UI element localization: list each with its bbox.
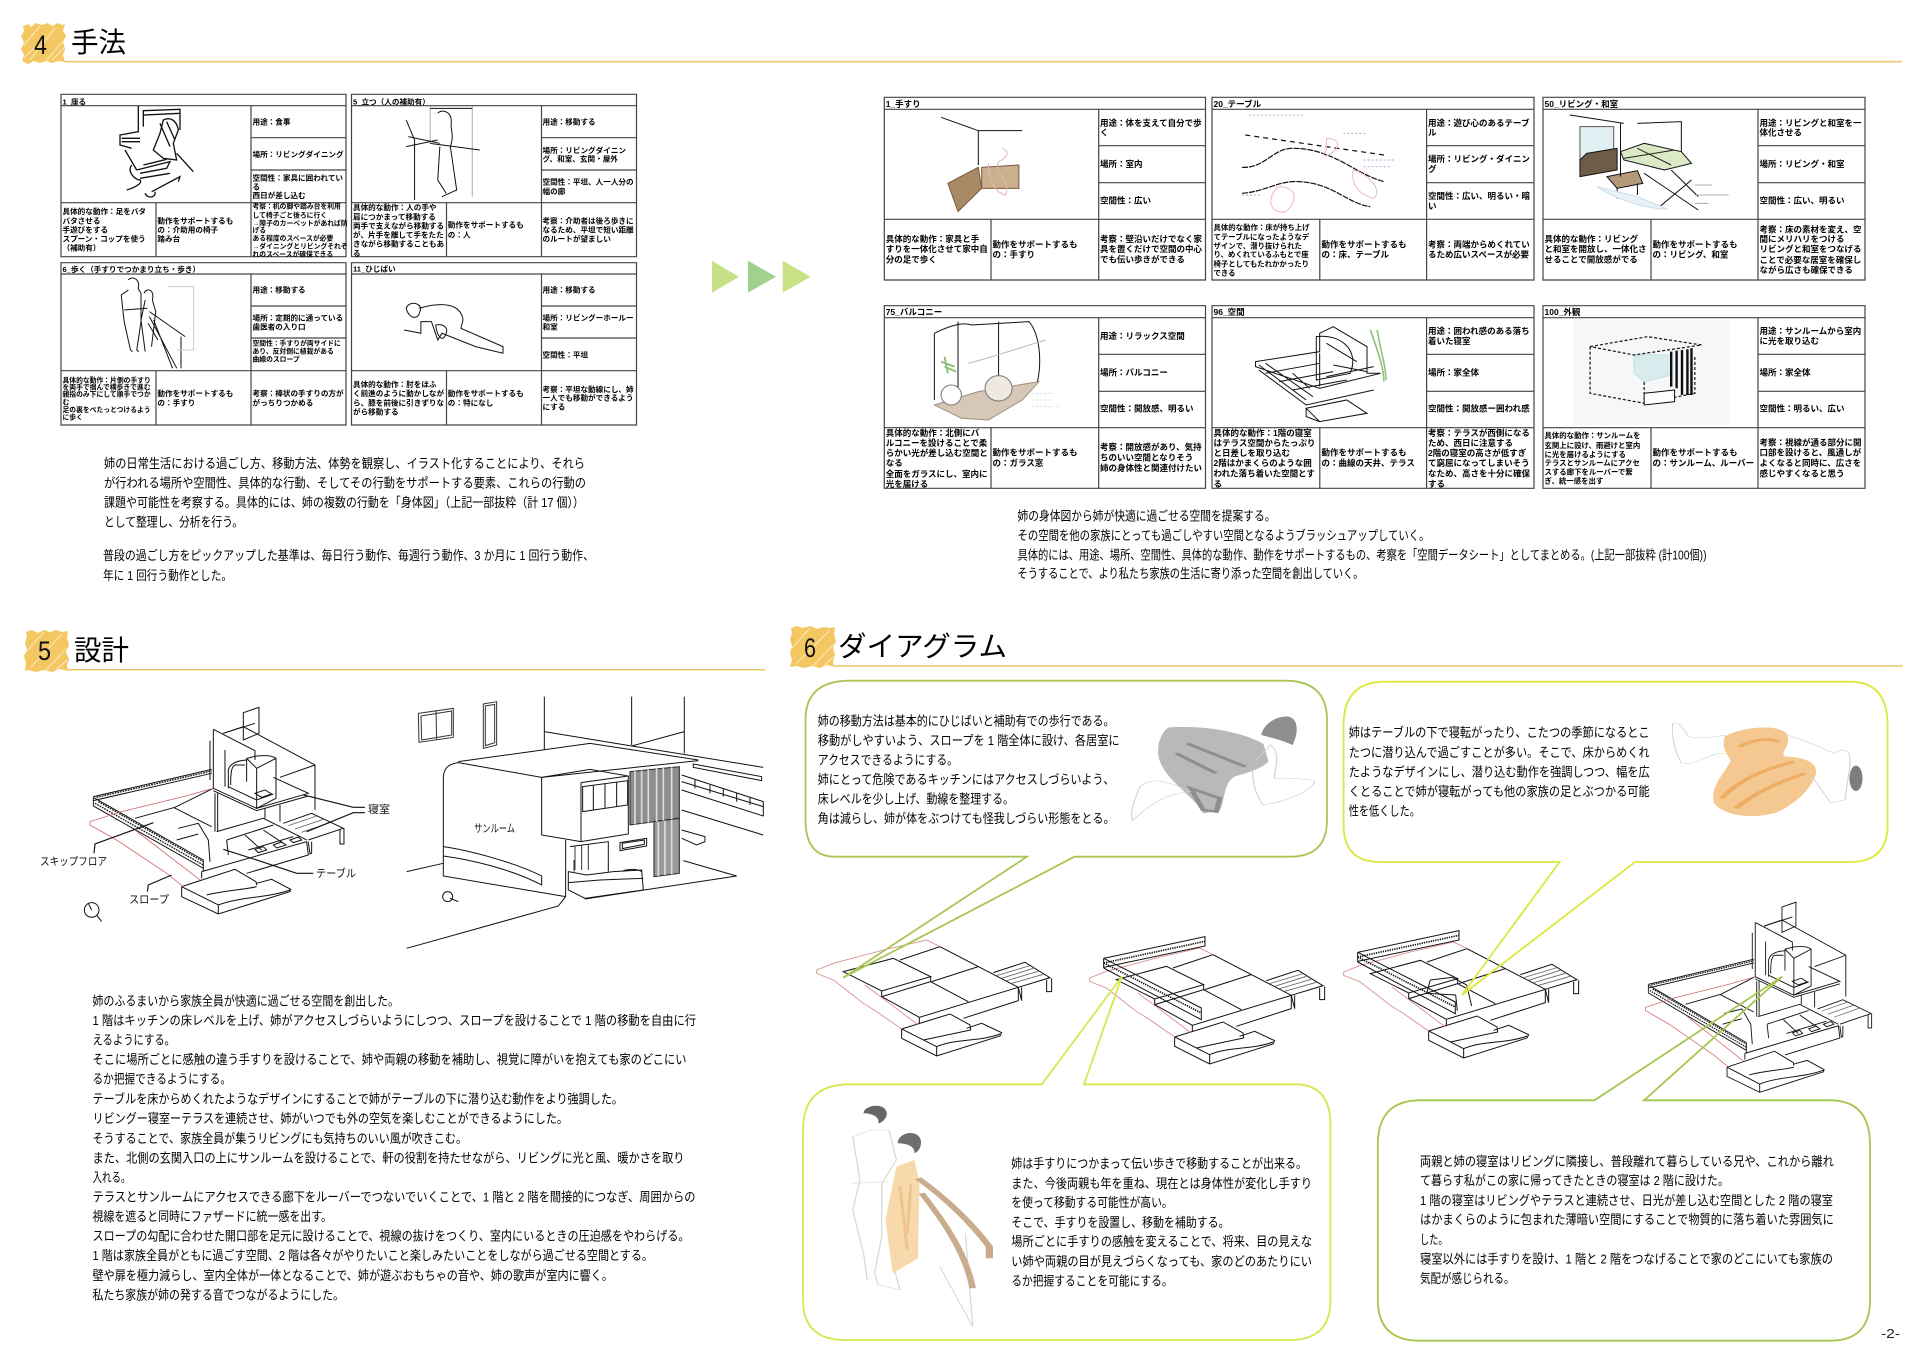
body text: design: そこに場所ごとに感触の違う手すりを設けることで、姉や両親の移動を補助し、視覚に障がいを抱えても家のどこにい <box>92 1052 686 1067</box>
figure: lying in orange <box>1672 723 1863 816</box>
sheet: 6 歩く: がっちりつかめる <box>252 397 313 407</box>
sheet: 5 立つ <box>352 94 636 258</box>
callout 3 text: 場所ごとに手すりの感触を変えることで、将来、目の見えな <box>1011 1234 1312 1249</box>
sketch: exterior <box>1573 320 1729 425</box>
number badge 5: 5 <box>38 636 51 666</box>
sheet: 1 座る: 空間性：家具に囲われてい <box>252 172 343 182</box>
sheet: 5 立つ: る <box>353 249 361 258</box>
callout 2 text: 性を低くした。 <box>1349 804 1420 818</box>
space sheet: 20 テーブル: 場所：リビング・ダイニン <box>1428 154 1530 164</box>
space sheet: 100 外観: の：サンルーム、ルーバー <box>1652 458 1754 468</box>
sheet: 1 座る: スプーン・コップを使う <box>62 233 146 243</box>
number badge 6 <box>790 626 836 668</box>
space sheet: 75 バルコニー: ちのいい空間となりそう <box>1100 452 1193 462</box>
space sheet: 20 テーブル: 考察：両端からめくれてい <box>1428 240 1530 250</box>
sheet: 1 座る: の：介助用の椅子 <box>157 224 219 234</box>
body text: design: 壁や扉を極力減らし、室内全体が一体となることで、姉が遊ぶおもちゃの音や、姉の歌声が室内に響く。 <box>92 1268 613 1283</box>
body text: design: 私たち家族が姉の発する音でつながるようにした。 <box>92 1288 344 1302</box>
sketch: handrail <box>941 117 1022 212</box>
sheet: 1 座る: る <box>252 182 260 191</box>
space sheet: 96 空間: 空間性：開放感ー囲われ感 <box>1428 404 1530 414</box>
sheet: 1 座る: 場所：リビングダイニング <box>252 149 344 159</box>
sheet: 1 座る: 具体的な動作：足をバタ <box>62 206 146 216</box>
callout 4 text <box>1420 1154 1834 1286</box>
sheet: 11 ひじばい: 11_ひじばい <box>353 263 396 273</box>
space sheet: 50 リビング・和室: ながら広さも確保できる <box>1760 265 1853 275</box>
sheet: 5 立つ: のルートが望ましい <box>542 233 611 243</box>
sheet: 1 座る: れのスペースが確保できる <box>252 250 333 259</box>
body text: section 4 right: 具体的には、用途、場所、空間性、具体的な動作、動作をサポートするもの、考察を「空間データシート」としてまとめる。(上記一部抜粋 (計100個)) <box>1018 548 1706 563</box>
sheet: 11 ひじばい <box>352 263 636 425</box>
sheet: 11 ひじばい: にする <box>542 402 565 411</box>
callout 4 text: 気配が感じられる。 <box>1420 1271 1514 1286</box>
figure: crawling in grey <box>1132 716 1314 821</box>
sheet: 11 ひじばい: 具体的な動作：肘をほふ <box>353 379 437 389</box>
space sheet: 50 リビング・和室: 具体的な動作：リビング <box>1544 234 1639 244</box>
heading: 設計: 設計 <box>74 635 129 666</box>
callout 2 text: たつに潜り込んで過ごすことが多い。そこで、床からめくれ <box>1349 745 1650 760</box>
section 6 header <box>790 626 1903 668</box>
sheet: 6 歩く: む <box>62 399 70 407</box>
space sheet: 96 空間: の：曲線の天井、テラス <box>1322 458 1415 468</box>
section 4 header <box>21 23 1902 64</box>
label: テーブル: テーブル <box>316 866 356 880</box>
diagram 3: floor with table <box>1344 931 1579 1058</box>
space sheet: 1 手すり: く <box>1100 128 1109 138</box>
space sheet: 75 バルコニー: らかい光が差し込む空間と <box>886 448 988 458</box>
body text: section 4 left: として整理し、分析を行う。 <box>104 515 243 530</box>
callout 2 text <box>1349 725 1650 818</box>
space sheet: 1 手すり: すりを一体化させて家中自 <box>886 244 988 254</box>
space sheet: 50 リビング・和室: の：リビング、和室 <box>1652 250 1729 260</box>
body text: design: 入れる。 <box>92 1170 130 1185</box>
sheet: 1 座る: して椅子ごと後ろに行く <box>252 210 327 219</box>
sketch: table <box>1242 115 1394 212</box>
callout 3: handrail <box>803 977 1330 1340</box>
space sheet: 1 手すり: 場所：室内 <box>1100 159 1143 169</box>
body text: section 4 right: 姉の身体図から姉が快適に過ごせる空間を提案する。 <box>1018 508 1276 524</box>
body text: section 4 left <box>103 456 594 583</box>
callout 3 text <box>1011 1156 1312 1288</box>
space sheet: 20 テーブル: できる <box>1214 268 1236 278</box>
callout 2: table <box>1344 682 1888 995</box>
body text: design: テラスとサンルームにアクセスできる廊下をルーバーでつないでいくことで、1 階と 2 階を間接的につなぎ、周囲からの <box>92 1190 696 1204</box>
space sheet: 96 空間: なため、高さを十分に確保 <box>1428 468 1531 478</box>
callout 1: movement <box>806 681 1327 978</box>
space sheet: 75 バルコニー: 動作をサポートするも <box>992 448 1078 458</box>
space sheet: 20 テーブル: 20_テーブル <box>1214 99 1262 109</box>
space sheet: 100 外観: スする廊下をルーバーで繋 <box>1544 468 1633 476</box>
space sheet: 50 リビング・和室 <box>1543 97 1865 280</box>
space sheet: 20 テーブル: グ <box>1428 164 1437 174</box>
page number: -2- <box>1881 1326 1900 1341</box>
sheet: 5 立つ: 肩につかまって移動する <box>353 211 436 221</box>
callout 4 text: て暮らす私がこの家に帰ってきたときの寝室は 2 階に設けた。 <box>1420 1173 1729 1188</box>
space sheet: 20 テーブル: るため広いスペースが必要 <box>1428 250 1529 260</box>
space sheet: 20 テーブル: の：床、テーブル <box>1322 250 1389 260</box>
space sheet: 50 リビング・和室: 場所：リビング・和室 <box>1760 159 1845 169</box>
space sheet: 75 バルコニー: 光を届ける <box>886 479 928 489</box>
space sheet: 1 手すり: の：手すり <box>992 250 1035 260</box>
sheet: 5 立つ: 動作をサポートするも <box>448 219 524 229</box>
space sheet: 1 手すり: 動作をサポートするも <box>992 240 1078 250</box>
space sheet: 50 リビング・和室: ことで必要な居室を確保し <box>1760 255 1861 265</box>
sheet: 5 立つ: 具体的な動作：人の手や <box>353 202 437 212</box>
space sheet: 100 外観: 場所：家全体 <box>1760 368 1811 378</box>
body text: design: 1 階は家族全員がともに過ごす空間、2 階は各々がやりたいこと楽しみたいことをしながら過ごせる空間とする。 <box>92 1248 653 1263</box>
sheet: 5 立つ: 5_立つ（人の補助有） <box>353 96 430 106</box>
sketch: balcony <box>934 322 1059 420</box>
space sheet: 96 空間: 考察：テラスが西側になる <box>1428 428 1530 438</box>
callout 3 text: 姉は手すりにつかまって伝い歩きで移動することが出来る。 <box>1011 1156 1307 1171</box>
sheet: 11 ひじばい: 空間性：平坦 <box>542 350 588 360</box>
sketch: walking with handrail <box>121 278 194 368</box>
body text: design <box>92 994 696 1302</box>
callout 1 text: 移動がしやすいよう、スロープを 1 階全体に設け、各居室に <box>818 733 1120 748</box>
space sheet: 1 手すり: 用途：体を支えて自分で歩 <box>1100 118 1202 128</box>
body text: design: リビングー寝室ーテラスを連続させ、姉がいつでも外の空気を楽しむことができるようにした。 <box>92 1111 568 1126</box>
sheet: 1 座る: ある程度のスペースが必要 <box>252 234 333 243</box>
sheet: 6 歩く: 場所：定期的に通っている <box>252 313 343 323</box>
space sheet: 50 リビング・和室: 考察：床の素材を変え、空 <box>1760 224 1862 234</box>
space sheet: 75 バルコニー <box>884 306 1206 489</box>
space sheet: 100 外観 <box>1543 306 1865 488</box>
sheet: 1 座る: 動作をサポートするも <box>157 215 233 225</box>
sheet: 5 立つ: きながら移動することもあ <box>353 239 445 249</box>
space sheet: 20 テーブル: り、めくれているふもとで座 <box>1214 250 1309 259</box>
body text: section 4 left: 年に 1 回行う動作とした。 <box>103 568 232 583</box>
building exterior drawing <box>407 697 763 948</box>
body text: section 4 left: が行われる場所や空間性、具体的な行動、そしてその行動をサポートする要素、これらの行動の <box>104 475 586 490</box>
callout 2 text: 姉はテーブルの下で寝転がったり、こたつの季節になるとこ <box>1349 725 1650 740</box>
body text: section 4 right: その空間を他の家族にとっても過ごしやすい空間となるようブラッシュアップしていく。 <box>1018 528 1430 543</box>
body text: section 4 left: 課題や可能性を考察する。具体的には、姉の複数の行動を「身体図」（上記一部抜粋（計 17 個）） <box>104 495 584 510</box>
sheet: 11 ひじばい: 動作をサポートするも <box>448 388 524 398</box>
space sheet: 20 テーブル: 空間性：広い、明るい・暗 <box>1428 191 1531 201</box>
space sheet: 96 空間: はテラス空間からたっぷり <box>1214 438 1315 448</box>
sheet: 1 座る <box>61 94 348 259</box>
space sheet: 100 外観: に光を届けるようにする <box>1544 450 1626 459</box>
space sheet: 96 空間: 場所：家全体 <box>1428 368 1480 378</box>
space sheet: 75 バルコニー: 用途：リラックス空間 <box>1100 331 1185 341</box>
space sheet: 1 手すり: 分の足で歩く <box>886 254 937 264</box>
space sheet: 100 外観: よくなると同時に、広さを <box>1760 458 1861 468</box>
callout 4 text: 寝室以外には手すりを設け、1 階と 2 階をつなげることで家のどこにいても家族の <box>1420 1252 1833 1266</box>
space sheet: 96 空間: 着いた寝室 <box>1428 336 1471 346</box>
space sheet: 1 手すり: 考察：壁沿いだけでなく家 <box>1100 234 1203 244</box>
body text: design: えるようにする。 <box>92 1032 175 1048</box>
callout 1 text: 角は減らし、姉が体をぶつけても怪我しづらい形態をとる。 <box>818 811 1114 826</box>
diagram 2: floor with handrail band <box>1090 937 1325 1064</box>
callout 4: bedrooms <box>1378 977 1870 1341</box>
space sheet: 96 空間: 96_空間 <box>1214 307 1245 317</box>
sheet: 1 座る: バタさせる <box>62 215 100 225</box>
callout 1 text: アクセスできるようにする。 <box>818 752 958 768</box>
sheet: 5 立つ: 考察：介助者は後ろ歩きに <box>542 216 634 226</box>
label: スロープ: スロープ <box>129 893 169 906</box>
callout 2 text: くとることで姉が寝転がっても他の家族の足とぶつかる可能 <box>1349 784 1650 799</box>
label: サンルーム: サンルーム <box>474 822 515 835</box>
space sheet: 96 空間: 動作をサポートするも <box>1322 448 1407 458</box>
sheet: 6 歩く: 足の裏をぺたっとつけるよう <box>62 405 151 414</box>
section 5 header <box>24 630 765 672</box>
sheet: 6 歩く: 6_歩く（手すりでつかまり立ち・歩き） <box>62 264 200 274</box>
sheet: 6 歩く: 親指のみ下にして順手でつか <box>62 390 151 399</box>
space sheet: 1 手すり: 具を置くだけで空間の中心 <box>1100 244 1203 254</box>
space sheet: 50 リビング・和室: リビングと和室をつなげる <box>1760 244 1862 254</box>
space sheet: 50 リビング・和室: 50_リビング・和室 <box>1544 99 1619 109</box>
space sheet: 1 手すり: 1_手すり <box>886 99 921 109</box>
body text: design: 視線を遮ると同時にファザードに統一感を出す。 <box>92 1209 332 1224</box>
space sheet: 100 外観: 空間性：明るい、広い <box>1760 404 1845 414</box>
space sheet: 50 リビング・和室: 間にメリハリをつける <box>1760 234 1845 244</box>
space sheet: 100 外観: 玄関上に設け、雨避けと室内 <box>1544 441 1640 450</box>
space sheet: 100 外観: 具体的な動作：サンルームを <box>1544 431 1640 440</box>
sheet: 1 座る: 手遊びをする <box>62 224 108 234</box>
sheet: 6 歩く: 動作をサポートするも <box>157 388 233 398</box>
sheet: 5 立つ: グ、和室、玄関・屋外 <box>542 154 618 164</box>
space sheet: 50 リビング・和室: 体化させる <box>1760 128 1802 138</box>
space sheet: 100 外観: 考察：視線が通る部分に開 <box>1760 438 1862 448</box>
space sheet: 1 手すり: 具体的な動作：家具と手 <box>886 234 980 244</box>
space sheet: 100 外観: に光を取り込む <box>1760 336 1820 346</box>
sheet: 11 ひじばい: の：特になし <box>448 397 493 407</box>
sheet: 6 歩く: 曲線のスロープ <box>252 354 300 363</box>
space sheet: 50 リビング・和室: と和室を開放し、一体化さ <box>1544 244 1647 254</box>
space sheet: 75 バルコニー: 75_バルコニー <box>886 307 942 317</box>
sheet: 11 ひじばい: 用途：移動する <box>542 285 596 295</box>
sheet: 5 立つ: 空間性：平坦、人一人分の <box>542 176 634 186</box>
sheet: 1 座る: （補助有） <box>62 243 100 253</box>
sheet: 5 立つ: が、片手を離して手をたた <box>353 229 444 239</box>
sheet: 5 立つ: 両手で支えながら移動する <box>353 221 444 231</box>
space sheet: 75 バルコニー: 空間性：開放感、明るい <box>1100 404 1194 414</box>
sheet: 11 ひじばい: 場所：リビングーホールー <box>542 313 634 323</box>
sheet: 6 歩く: の：手すり <box>157 397 195 407</box>
callout 4 text: した。 <box>1420 1232 1448 1247</box>
sheet: 1 座る: 踏み台 <box>157 233 181 243</box>
callout 2 text: たようなデザインにし、潜り込む動作を強調しつつ、幅を広 <box>1349 764 1650 780</box>
number badge 4: 4 <box>34 30 47 60</box>
space sheet: 100 外観: 用途：サンルームから室内 <box>1760 326 1861 336</box>
sheet: 11 ひじばい: がら移動する <box>353 407 399 417</box>
space sheet: 20 テーブル: ル <box>1428 128 1437 138</box>
callout 1 text: 床レベルを少し上げ、動線を整理する。 <box>818 792 1014 806</box>
sheet: 11 ひじばい: く前進のように動かしなが <box>353 388 445 398</box>
sheet: 1 座る: げる <box>252 226 266 235</box>
sheet: 1 座る: 西日が差し込む <box>252 190 306 200</box>
sheet: 6 歩く <box>61 263 346 425</box>
number badge 5 <box>24 630 69 672</box>
sheet: 1 座る: →障子のカーペットがあれば防 <box>252 218 348 227</box>
figure: walking with handrail <box>853 1106 989 1327</box>
isometric design drawing <box>40 707 390 922</box>
callout 4 text: 1 階の寝室はリビングやテラスと連続させ、日光が差し込む空間とした 2 階の寝室 <box>1420 1193 1833 1208</box>
sheet: 6 歩く: 歯医者の入り口 <box>252 322 306 332</box>
body text: design: 姉のふるまいから家族全員が快適に過ごせる空間を創出した。 <box>92 994 399 1008</box>
sketch: standing figure <box>406 107 480 200</box>
space sheet: 100 外観: 感じやすくなると思う <box>1760 468 1845 478</box>
heading: 手法: 手法 <box>71 27 126 58</box>
sketch: space isometric <box>1255 327 1386 422</box>
body text: design: 1 階はキッチンの床レベルを上げ、姉がアクセスしづらいようにしつつ、スロープを設けることで 1 階の移動を自由に行 <box>92 1013 696 1028</box>
space sheet: 50 リビング・和室: 動作をサポートするも <box>1652 240 1738 250</box>
space sheet: 1 手すり <box>884 97 1206 280</box>
space sheet: 75 バルコニー: 姉の身体性と関連付けたい <box>1100 463 1202 473</box>
body text: design: テーブルを床からめくれたようなデザインにすることで姉がテーブルの下に潜り込む動作をより強調した。 <box>92 1092 623 1106</box>
callout 3 text: を使って移動する可能性が高い。 <box>1011 1195 1173 1210</box>
body text: design: スロープの勾配に合わせた開口部を足元に設けることで、視線の抜けをつくり、室内にいるときの圧迫感をやわらげる。 <box>92 1228 690 1244</box>
sheet: 5 立つ: 場所：リビングダイニン <box>542 145 626 155</box>
arrows between sheets <box>712 261 811 293</box>
sheet: 11 ひじばい: ら、膝を前後に引きずりな <box>353 397 445 407</box>
space sheet: 20 テーブル <box>1212 97 1534 280</box>
sketch: crawling figure <box>404 303 503 353</box>
callout 4 text: はかまくらのように包まれた薄暗い空間にすることで物質的に落ち着いた雰囲気に <box>1420 1212 1834 1227</box>
space sheet: 75 バルコニー: 具体的な動作：北側にバ <box>886 428 980 438</box>
space sheet: 96 空間 <box>1212 306 1534 489</box>
callout 3 text: るか把握することを可能にする。 <box>1011 1274 1173 1288</box>
space sheet: 1 手すり: 空間性：広い <box>1100 196 1151 206</box>
sheet: 6 歩く: あり、反対側に植栽がある <box>252 347 334 356</box>
space sheet: 75 バルコニー: ルコニーを設けることで柔 <box>886 438 988 448</box>
space sheet: 75 バルコニー: の：ガラス窓 <box>992 458 1044 468</box>
space sheet: 20 テーブル: ザインで、潜り抜けられた <box>1214 242 1302 250</box>
sheet: 6 歩く: 具体的な動作：片側の手すり <box>62 375 151 384</box>
space sheet: 96 空間: する <box>1428 479 1445 489</box>
sheet: 5 立つ: の：人 <box>448 230 471 239</box>
space sheet: 20 テーブル: 椅子としてもたれかかったり <box>1214 260 1309 268</box>
callout 3 text: また、今後両親も年を重ね、現在とは身体性が変化し手すり <box>1011 1176 1312 1191</box>
sheet: 1 座る: 1_座る <box>62 96 86 106</box>
sketch: living and tatami <box>1570 115 1729 210</box>
space sheet: 96 空間: て窮屈になってしまいそう <box>1428 458 1530 468</box>
body text: design: また、北側の玄関入口の上にサンルームを設けることで、軒の役割を持たせながら、リビングに光と風、暖かさを取り <box>92 1150 684 1166</box>
sheet: 1 座る: 用途：食事 <box>252 116 291 126</box>
space sheet: 20 テーブル: てテーブルになったようなデ <box>1214 232 1310 242</box>
space sheet: 1 手すり: でも伝い歩きができる <box>1100 254 1185 264</box>
number badge 4 <box>21 23 66 64</box>
sketch: seated figure <box>120 106 193 197</box>
body text: design: そうすることで、家族全員が集うリビングにも気持ちのいい風が吹きこむ。 <box>92 1131 467 1146</box>
sheet: 5 立つ: 幅の廊 <box>542 186 566 196</box>
space sheet: 20 テーブル: 具体的な動作：床が持ち上げ <box>1214 223 1310 232</box>
callout 3 text: そこで、手すりを設置し、移動を補助する。 <box>1011 1215 1230 1230</box>
sheet: 5 立つ: なるため、平坦で短い距離 <box>542 225 634 235</box>
space sheet: 75 バルコニー: 全面をガラスにし、室内に <box>886 469 988 479</box>
label: 寝室: 寝室 <box>368 803 390 816</box>
sheet: 11 ひじばい: 一人でも移動ができるよう <box>542 393 633 403</box>
space sheet: 100 外観: テラスとサンルームにアクセ <box>1544 458 1640 468</box>
space sheet: 100 外観: ぎ、統一感を出す <box>1544 476 1603 486</box>
callout 3 text: い姉や両親の目が見えづらくなっても、家のどのあたりにい <box>1011 1254 1312 1269</box>
space sheet: 96 空間: 2階の寝室の高さが低すぎ <box>1428 448 1527 458</box>
space sheet: 96 空間: 具体的な動作：1階の寝室 <box>1214 428 1312 438</box>
callout 1 text: 姉にとって危険であるキッチンにはアクセスしづらいよう、 <box>818 772 1114 787</box>
space sheet: 100 外観: 100_外観 <box>1544 307 1581 317</box>
space sheet: 100 外観: 動作をサポートするも <box>1652 448 1738 458</box>
body text: section 4 right: そうすることで、より私たち家族の生活に寄り添った空間を創出していく。 <box>1018 566 1364 581</box>
space sheet: 20 テーブル: い <box>1428 201 1437 211</box>
sheet: 1 座る: 考察：机の脚や踏み台を利用 <box>252 202 341 211</box>
space sheet: 75 バルコニー: 場所：バルコニー <box>1100 368 1168 378</box>
callout 4 text: 両親と姉の寝室はリビングに隣接し、普段離れて暮らしている兄や、これから離れ <box>1420 1154 1834 1169</box>
callout 1 text: 姉の移動方法は基本的にひじばいと補助有での歩行である。 <box>818 714 1114 728</box>
space sheet: 96 空間: ため、西日に注意する <box>1428 438 1513 448</box>
space sheet: 96 空間: と日差しを取り込む <box>1214 448 1291 458</box>
diagram 1: floor with slope <box>817 940 1052 1056</box>
label: スキップフロア: スキップフロア <box>40 855 107 868</box>
body text: section 4 right <box>1018 508 1706 581</box>
space sheet: 50 リビング・和室: せることで開放感がでる <box>1544 254 1638 264</box>
number badge 6: 6 <box>804 633 816 663</box>
sheet: 6 歩く: を両手で掴んで横歩きで進む <box>62 382 151 391</box>
sheet: 6 歩く: 用途：移動する <box>252 285 306 295</box>
diagram 4: whole house isometric <box>1645 902 1872 1092</box>
sheet: 6 歩く: に歩く <box>62 412 83 421</box>
space sheet: 96 空間: 用途：囲われ感のある落ち <box>1428 326 1530 336</box>
space sheet: 50 リビング・和室: 用途：リビングと和室を一 <box>1760 118 1862 128</box>
sheet: 11 ひじばい: 和室 <box>542 322 558 332</box>
space sheet: 50 リビング・和室: 空間性：広い、明るい <box>1760 196 1845 206</box>
sheet: 6 歩く: 考察：棒状の手すりの方が <box>252 388 344 398</box>
space sheet: 20 テーブル: 動作をサポートするも <box>1322 240 1407 250</box>
sheet: 1 座る: →ダイニングとリビングそれぞ <box>252 242 348 251</box>
space sheet: 100 外観: 口部を設けると、風通しが <box>1760 448 1862 458</box>
space sheet: 96 空間: 2階はかまくらのような囲 <box>1214 458 1312 468</box>
sheet: 6 歩く: 空間性：手すりが両サイドに <box>252 338 341 347</box>
body text: section 4 left: 姉の日常生活における過ごし方、移動方法、体勢を観察し、イラスト化することにより、それら <box>104 456 585 471</box>
space sheet: 20 テーブル: 用途：遊び心のあるテーブ <box>1428 118 1530 128</box>
callout 1 text <box>818 714 1120 826</box>
body text: section 4 left: 普段の過ごし方をピックアップした基準は、毎日行う動作、毎週行う動作、3 か月に 1 回行う動作、 <box>103 548 594 563</box>
space sheet: 75 バルコニー: 考察：開放感があり、気持 <box>1100 442 1202 452</box>
space sheet: 96 空間: われた落ち着いた空間とす <box>1214 468 1315 478</box>
space sheet: 75 バルコニー: なる <box>886 458 903 468</box>
body text: design: るか把握できるようにする。 <box>92 1072 231 1086</box>
sheet: 5 立つ: 用途：移動する <box>542 116 596 126</box>
space sheet: 96 空間: る <box>1214 479 1222 489</box>
sheet: 11 ひじばい: 考察：平坦な動線にし、姉 <box>542 384 634 394</box>
heading: ダイアグラム: ダイアグラム <box>838 631 1007 662</box>
